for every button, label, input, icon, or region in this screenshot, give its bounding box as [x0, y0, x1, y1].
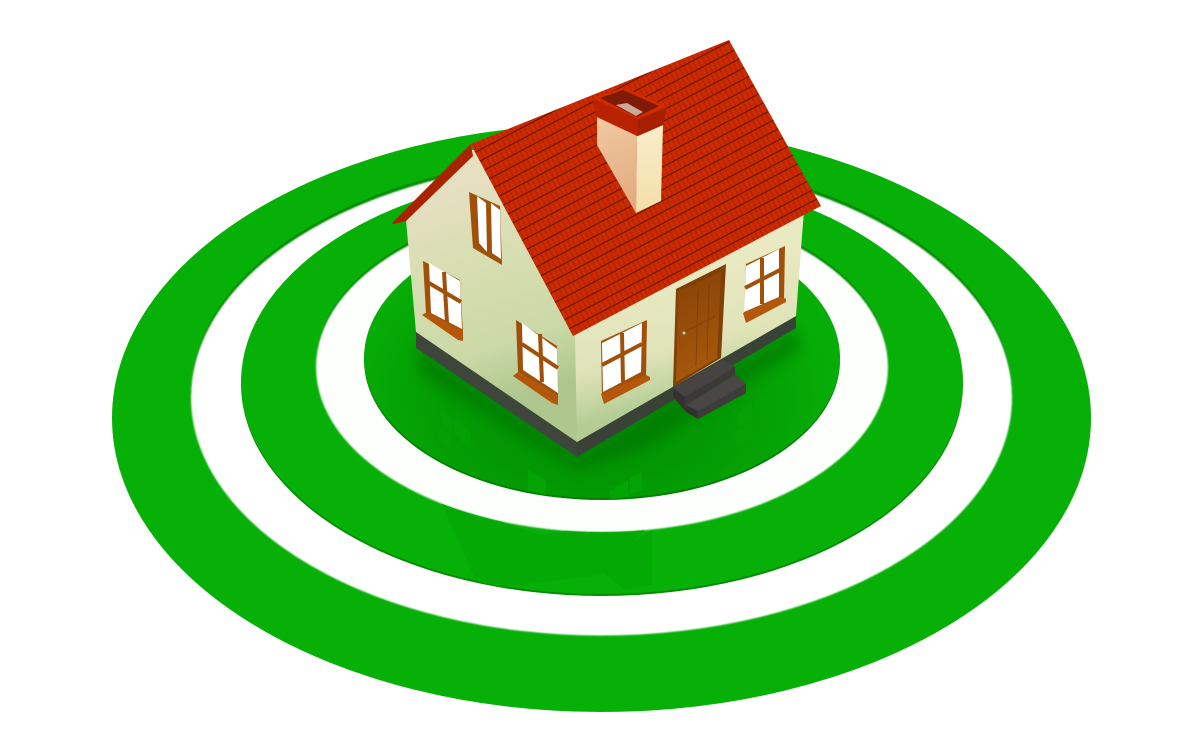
tiled roof [471, 40, 821, 336]
sill [743, 297, 786, 323]
inner disc lower lip [364, 220, 840, 500]
muntins [522, 334, 558, 382]
chimney cap front [592, 98, 638, 136]
sill [513, 372, 558, 405]
foundation [416, 316, 796, 457]
glass [429, 263, 462, 329]
outer white ring [191, 160, 1012, 636]
outer green ring [112, 124, 1091, 712]
middle ring lower lip [241, 172, 963, 596]
muntins [429, 272, 461, 323]
door panels [684, 284, 716, 366]
frame [516, 320, 558, 396]
door [673, 264, 726, 387]
reflected right window [736, 394, 768, 446]
left wall upper window [422, 261, 463, 341]
sill [601, 375, 650, 404]
frame [469, 192, 502, 265]
frame [744, 246, 785, 314]
chimney cap top [592, 87, 667, 119]
door knob [682, 332, 686, 334]
chimney cap side [638, 107, 667, 136]
left gable wall [406, 150, 590, 442]
chimney left face [597, 117, 637, 213]
chimney [592, 87, 667, 213]
house reflection on inner disc [416, 328, 800, 500]
glass [744, 249, 779, 312]
reflected roof shape [442, 504, 645, 587]
reflected left window [438, 412, 471, 450]
foundation right face [577, 316, 796, 457]
contact shadow [416, 328, 800, 470]
muntins [602, 333, 642, 382]
upper step side [673, 388, 686, 412]
house [392, 40, 821, 457]
inner green disc [364, 218, 840, 498]
gable window [469, 192, 502, 265]
panes [477, 196, 487, 252]
reflected lower windows [528, 470, 642, 500]
left wall lower window [513, 320, 558, 405]
inner white ring [316, 202, 888, 532]
right wall [575, 210, 804, 442]
lower step top [686, 375, 746, 411]
muntins [745, 258, 780, 304]
middle green ring [241, 170, 963, 594]
target: concentric green rings [112, 124, 1091, 712]
chimney right face [636, 125, 663, 213]
bargeboard [392, 144, 473, 224]
outer ring inner lip [191, 156, 1012, 632]
door leaf [676, 272, 721, 382]
middle ring inner lip [316, 199, 888, 529]
lower step front [698, 384, 746, 419]
frame [601, 320, 647, 398]
right wall small window [743, 246, 786, 323]
door frame [673, 264, 726, 387]
glass [602, 323, 642, 392]
chimney opening [600, 90, 659, 117]
frame [423, 261, 463, 333]
upper step front [685, 367, 735, 405]
steps [673, 360, 746, 419]
illustration: house on green target [112, 40, 1091, 712]
foundation left face [416, 332, 577, 457]
right wall lower window [601, 320, 650, 404]
lower step side [686, 405, 698, 419]
sill [422, 312, 463, 341]
chimney flue [616, 103, 643, 116]
roof reflection on middle ring [440, 500, 652, 590]
reflected chimney [651, 530, 652, 531]
glass [522, 323, 558, 393]
upper step top [673, 360, 735, 397]
